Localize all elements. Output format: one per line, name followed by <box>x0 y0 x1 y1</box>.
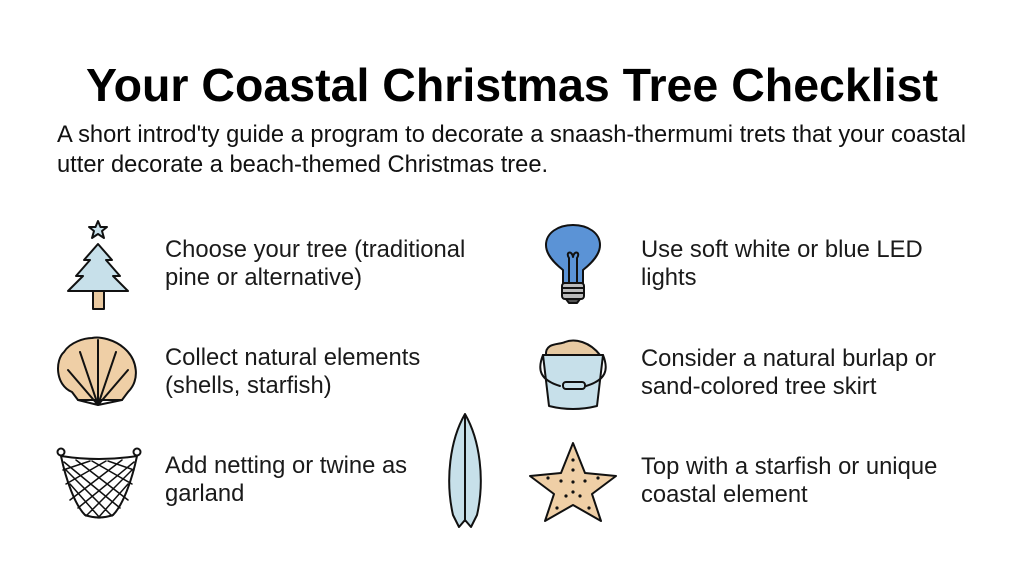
item: choose tree: Choose your tree (traditional <box>165 236 465 263</box>
icon: sand bucket <box>540 341 606 409</box>
item: choose tree: pine or alternative) <box>165 264 362 291</box>
item: choose tree <box>165 236 465 291</box>
item: lights: Use soft white or blue LED <box>641 236 923 263</box>
icon: light bulb <box>546 225 600 303</box>
icon: christmas tree <box>68 221 128 309</box>
item: natural elements: (shells, starfish) <box>165 372 332 399</box>
item: lights <box>641 236 923 291</box>
title: Your Coastal Christmas Tree Checklist <box>86 59 938 111</box>
item: tree skirt: sand-colored tree skirt <box>641 373 876 400</box>
item: netting: garland <box>165 480 244 507</box>
item: netting: Add netting or twine as <box>165 452 407 479</box>
item: topper: Top with a starfish or unique <box>641 453 937 480</box>
item: tree skirt <box>641 345 936 400</box>
intro text <box>57 122 966 178</box>
item: tree skirt: Consider a natural burlap or <box>641 345 936 372</box>
icon: starfish <box>530 443 616 521</box>
item: natural elements: Collect natural elements <box>165 344 420 371</box>
item: topper <box>641 453 937 508</box>
icon: surfboard <box>449 414 481 527</box>
item: netting <box>165 452 407 507</box>
item: topper: coastal element <box>641 481 808 508</box>
intro text: A short introd'ty guide a program to decorate a snaash-thermumi trets that your coastal <box>57 122 966 148</box>
item: lights: lights <box>641 264 697 291</box>
icon: seashell <box>58 337 136 405</box>
intro text: utter decorate a beach-themed Christmas tree. <box>57 152 548 178</box>
icon: net <box>58 448 140 518</box>
item: natural elements <box>165 344 420 399</box>
